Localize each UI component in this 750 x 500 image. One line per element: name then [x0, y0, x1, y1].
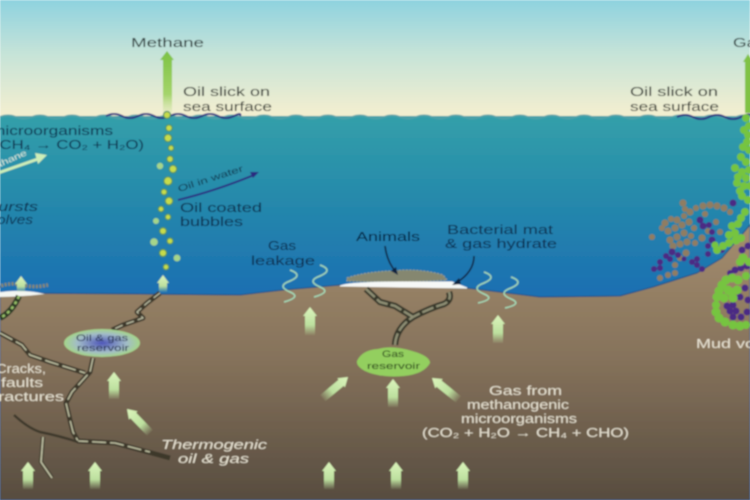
oil and gas reservoir: reservoir [77, 343, 129, 354]
left seep conduit [0, 296, 19, 318]
oil slick: right [677, 114, 750, 119]
animals seep: mat, animals, hydrate [340, 246, 474, 288]
oil coated bubbles label [180, 201, 262, 229]
cracks, faults and fractures label: faults [1, 376, 43, 390]
right gas arrow [743, 54, 750, 113]
gas reservoir [357, 347, 430, 376]
hydrate pointer [456, 256, 474, 283]
oil slick label: left: Oil slick on [183, 85, 270, 99]
oil and gas reservoir: Oil & gas [76, 333, 128, 344]
thermogenic label: oil & gas [178, 452, 249, 466]
methane arrow [160, 51, 174, 113]
oil slick: left [106, 114, 240, 118]
animals label: Animals [356, 230, 420, 244]
methanogenic gas label: Gas from [489, 384, 562, 398]
thermogenic label: Thermogenic [161, 438, 268, 452]
gas leakage label [251, 239, 315, 268]
gas reservoir: Gas [382, 349, 404, 360]
green particles [712, 114, 750, 330]
methane label: Methane [131, 36, 204, 50]
thermogenic label [161, 438, 268, 466]
methanogenic gas label: microorganisms [461, 412, 577, 426]
methanogenic gas label: (CO₂ + H₂O → CH₄ + CHO) [422, 426, 629, 440]
oil slick label: left: sea surface [183, 100, 272, 114]
gas leakage label: Gas [268, 239, 296, 253]
oil bubbles column [151, 112, 180, 270]
gas leakage label: leakage [251, 254, 315, 268]
brown particles [649, 200, 733, 281]
gas leakage squiggles [283, 265, 518, 308]
oil slick label: right [630, 85, 719, 114]
gas reservoir: reservoir [367, 361, 420, 372]
background: seabed [0, 225, 750, 500]
bacterial mat label [445, 223, 557, 251]
animals pointer [385, 246, 396, 272]
bacterial mat label: Bacterial mat [447, 223, 554, 237]
mud volcano plume [649, 114, 750, 330]
bacterial mat label: & gas hydrate [445, 237, 557, 251]
methanogenic gas label [422, 384, 629, 440]
oil slick label: right: Oil slick on [630, 85, 718, 99]
conduits: thermogenic system [0, 293, 170, 478]
oil and gas reservoir [64, 329, 140, 357]
oil in water arrow [177, 163, 259, 200]
oil coated bubbles label: Oil coated [180, 201, 262, 215]
methane diagonal arrow [0, 147, 47, 173]
sea surface waves [0, 116, 750, 118]
oil slick label: left [183, 85, 272, 114]
background: sea [0, 116, 750, 300]
methanogenic gas label: methanogenic [467, 398, 569, 412]
oil in water arrow: Oil in water [177, 163, 244, 194]
bursts dissolves label [0, 200, 38, 227]
conduits to gas reservoir [366, 289, 450, 345]
cracks, faults and fractures label [0, 362, 64, 404]
left seep mat [0, 284, 48, 297]
background: sky [0, 0, 750, 118]
green upward arrows [15, 275, 505, 489]
oil slick label: right: sea surface [630, 100, 719, 114]
microorganisms label [0, 124, 144, 152]
purple particles [651, 200, 750, 320]
oil coated bubbles label: bubbles [180, 215, 243, 229]
